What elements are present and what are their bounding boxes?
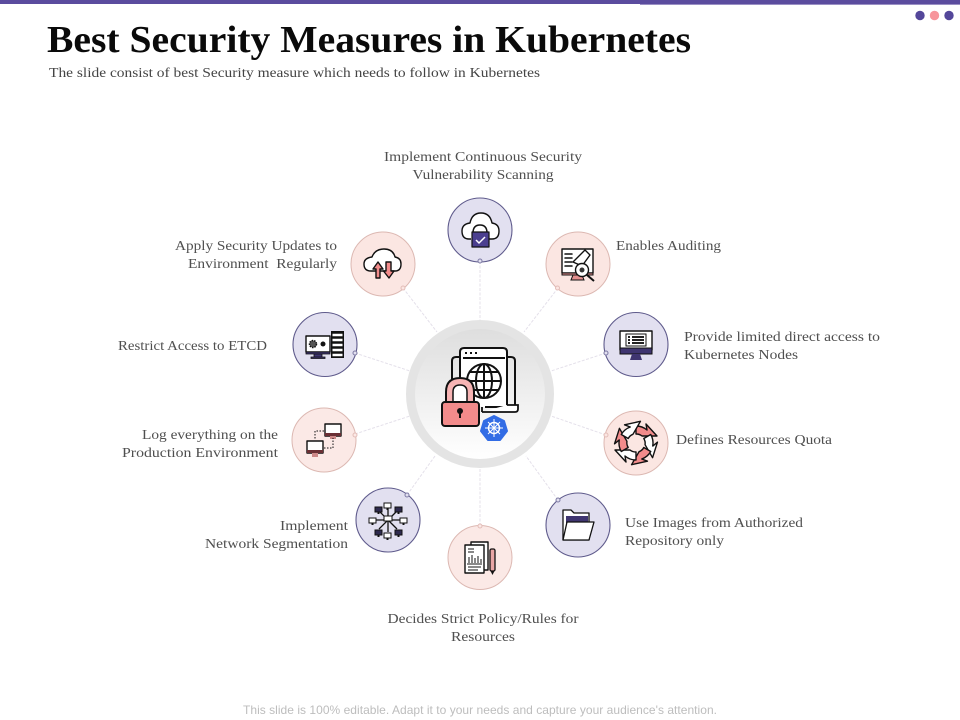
icon: network topology (369, 503, 407, 540)
label: limited access (684, 330, 880, 363)
label: continuous scanning: Implement Continuous Security (384, 150, 582, 165)
subtitle: The slide consist of best Security measure which needs to follow in Kubernetes (49, 66, 540, 81)
label: limited access: Kubernetes Nodes (684, 348, 798, 363)
label: apply updates (175, 239, 337, 272)
connector lines (355, 261, 606, 526)
label: limited access: Provide limited direct access to (684, 330, 880, 345)
icon: auditing magnifier (562, 249, 594, 281)
icon: padlock (442, 378, 479, 426)
icon: linked monitors (307, 424, 341, 457)
icon: cloud with lock (462, 213, 499, 247)
icon: circular arrows (609, 415, 663, 471)
icon: desktop monitor (620, 331, 652, 360)
node: limited access (604, 312, 668, 376)
icon: documents and pen (465, 542, 495, 575)
decorative dots (915, 11, 954, 20)
label: log everything: Production Environment (122, 446, 278, 461)
label: restrict etcd: Restrict Access to ETCD (118, 339, 267, 354)
icon: kubernetes logo (481, 416, 507, 440)
label: resource quota: Defines Resources Quota (676, 433, 833, 448)
top bar (0, 0, 960, 5)
label: continuous scanning (384, 150, 582, 183)
node: log everything (292, 408, 357, 472)
label: apply updates: Environment Regularly (188, 257, 337, 272)
node: apply updates (351, 232, 415, 296)
node: authorized images (546, 493, 610, 557)
label: strict policy: Decides Strict Policy/Rules for (388, 612, 579, 627)
label: authorized images: Use Images from Authorized (625, 516, 803, 531)
icon: web page document (452, 348, 518, 412)
node: restrict etcd (293, 312, 357, 376)
node: continuous scanning (448, 198, 512, 263)
node: auditing (546, 232, 610, 296)
label: authorized images: Repository only (625, 534, 724, 549)
icon: monitor and server (306, 331, 344, 358)
label: auditing: Enables Auditing (616, 239, 721, 254)
icon: cloud with arrows (364, 249, 401, 278)
label: network segmentation: Network Segmentation (205, 537, 348, 552)
node: resource quota (604, 411, 668, 475)
label: strict policy: Resources (451, 630, 515, 645)
label: log everything (122, 428, 278, 461)
label: apply updates: Apply Security Updates to (175, 239, 337, 254)
node: network segmentation (356, 488, 420, 552)
title: Best Security Measures in Kubernetes (47, 19, 691, 61)
label: authorized images (625, 516, 803, 549)
icon: globe (467, 364, 501, 398)
label: strict policy (388, 612, 579, 645)
label: network segmentation (205, 519, 348, 552)
central hub (406, 320, 554, 468)
label: network segmentation: Implement (280, 519, 348, 534)
node: strict policy (448, 524, 512, 590)
label: continuous scanning: Vulnerability Scanning (412, 168, 554, 183)
label: log everything: Log everything on the (142, 428, 278, 443)
footer note: This slide is 100% editable. Adapt it to your needs and capture your audience's attention. (243, 703, 717, 717)
icon: folder (563, 510, 594, 540)
